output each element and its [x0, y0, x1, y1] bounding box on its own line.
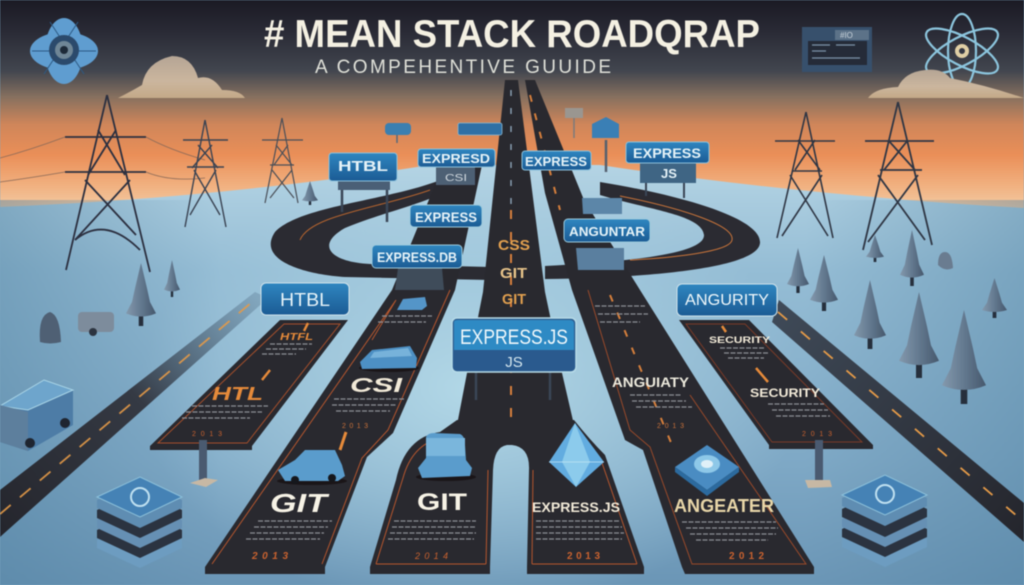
sign: EXPRESD with CSI: CSI	[445, 173, 467, 184]
sign: EXPRESS.JS main: EXPRESS.JS	[460, 326, 568, 349]
sign: ANGURITY	[677, 284, 777, 316]
sign sublabel JS: JS	[661, 166, 677, 181]
sign: ANGURITY: ANGURITY	[685, 292, 769, 309]
trees	[126, 181, 1007, 404]
road label: CSI: CSI	[350, 375, 403, 397]
layered stack right	[842, 475, 927, 567]
sign: EXPRESS center left: EXPRESS	[415, 209, 477, 225]
year label 2014: 2014	[414, 551, 448, 561]
cloud left	[118, 56, 245, 98]
small car on CSS road	[397, 297, 427, 310]
road: CSS to GIT	[205, 165, 482, 574]
rock right	[938, 252, 953, 269]
sign: EXPRESS center left	[410, 205, 482, 227]
icon: right atom emblem	[920, 14, 1004, 88]
sign: small far center	[458, 123, 502, 135]
road label: HTFL: HTFL	[280, 332, 313, 343]
road: Angular	[525, 80, 814, 574]
sky background	[0, 0, 1024, 215]
icon: left atom emblem	[30, 18, 98, 84]
road: Security	[679, 320, 873, 449]
code panel	[802, 27, 872, 72]
subtitle: A COMPEHENTIVE GUUIDE	[315, 57, 611, 78]
sign: EXPRESD with CSI	[418, 149, 495, 185]
sign: EXPRESD with CSI: EXPRESD	[422, 151, 490, 166]
sign sublabel JS: JS	[505, 354, 523, 371]
year label 2013: 2013	[567, 551, 600, 562]
road label: ANGUIATY: ANGUIATY	[612, 374, 690, 390]
filler text lines	[182, 344, 312, 418]
post right	[805, 440, 832, 488]
road label: GIT lower: GIT	[502, 291, 526, 308]
year label 2013: 2013	[192, 431, 222, 438]
sign: small far left	[385, 123, 411, 143]
car on CSS road	[359, 346, 419, 372]
sign: far gray	[565, 108, 583, 138]
pylon 2	[183, 120, 228, 227]
road label: CSS: CSS	[498, 237, 530, 254]
pylon 4	[775, 112, 835, 238]
road label: ANGEATER: ANGEATER	[674, 496, 774, 516]
far right road	[772, 300, 1024, 542]
ground plane	[0, 165, 1024, 585]
sign: EXPRESS right: EXPRESS	[525, 154, 587, 169]
road label: SECURITY small: SECURITY	[709, 335, 770, 345]
car on GIT road	[277, 450, 347, 485]
sign: far diamond	[592, 117, 619, 172]
filler text lines	[246, 316, 432, 539]
layered stack left	[97, 477, 182, 568]
stacked block right lower	[576, 248, 624, 270]
road label: GIT: GIT	[270, 488, 330, 518]
shield platform icon	[675, 445, 739, 496]
left loop road	[271, 178, 490, 280]
sign: HTBL upper: HTBL	[338, 158, 388, 175]
sign: HTBL lower	[261, 283, 349, 315]
year label 2012: 2012	[729, 551, 764, 562]
gray vehicle	[78, 312, 114, 336]
filler text lines	[595, 306, 778, 540]
post left	[190, 440, 218, 487]
year label 2013: 2013	[657, 423, 684, 430]
sign: EXPRESS JS right: EXPRESS	[633, 145, 701, 161]
pylon 5	[863, 102, 934, 250]
code panel: #IO	[840, 31, 853, 40]
road label: EXPRESS.JS: EXPRESS.JS	[532, 499, 620, 515]
pylon 3	[262, 118, 303, 203]
cloud right	[868, 70, 1024, 98]
year label 2013 lower: 2013	[251, 551, 288, 562]
gem icon	[549, 423, 604, 487]
sign: EXPRESS JS right	[626, 142, 709, 198]
road label: SECURITY: SECURITY	[750, 386, 820, 400]
pylon 1	[0, 95, 205, 272]
title: # MEAN STACK ROADQRAP	[264, 13, 760, 56]
sign: EXPRESS.JS main	[452, 318, 576, 400]
sign: EXPRESS.DB	[372, 245, 462, 268]
sign: HTBL upper	[329, 153, 397, 222]
right loop road	[545, 182, 760, 279]
sign: EXPRESS.DB: EXPRESS.DB	[377, 249, 457, 265]
road label: HTL: HTL	[212, 384, 263, 404]
sign: ANGUNTAR: ANGUNTAR	[569, 224, 646, 239]
truck left	[0, 380, 73, 451]
road: HTML	[150, 320, 348, 450]
road: Git and Express.js arch	[370, 420, 644, 574]
center road	[457, 80, 574, 425]
sign: HTBL lower: HTBL	[280, 290, 330, 310]
rock	[40, 312, 61, 344]
year label 2013: 2013	[802, 431, 832, 438]
stack under Express.DB	[395, 268, 444, 290]
road label: GIT: GIT	[417, 489, 467, 516]
sign: ANGUNTAR	[564, 219, 650, 242]
year label 2013 upper: 2013	[342, 423, 368, 430]
van on GIT road	[416, 433, 476, 481]
far left road	[0, 292, 268, 537]
road label: GIT: GIT	[500, 265, 527, 282]
filler text lines	[720, 348, 830, 416]
stacked block right upper	[582, 198, 622, 214]
filler text lines	[388, 521, 624, 539]
